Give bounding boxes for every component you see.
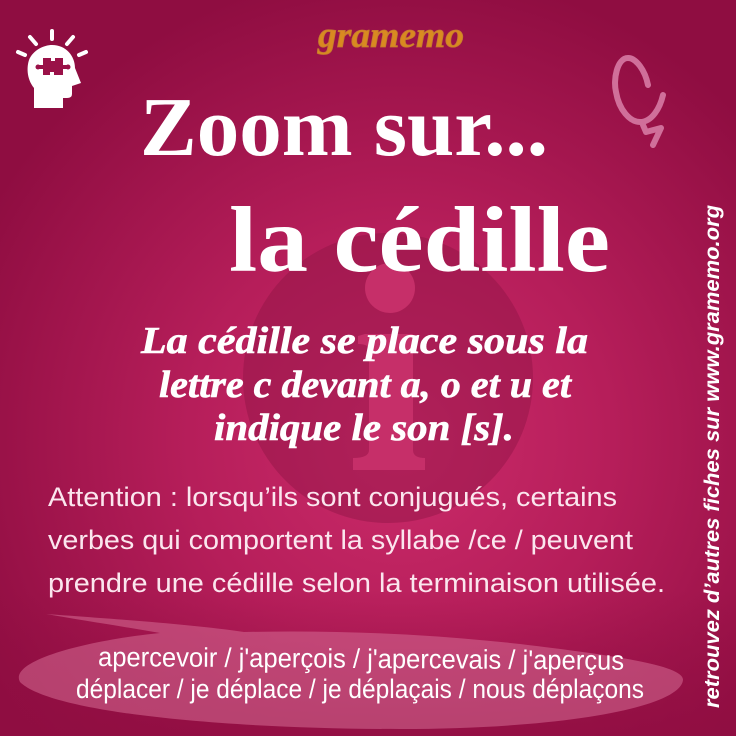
icon: c cedilla [615,58,663,145]
attention paragraph: Attention : lorsqu’ils sont conjugués, certains [48,482,617,512]
vertical website credit: retrouvez d’autres fiches sur www.gramemo.org [700,205,724,708]
title: Zoom sur...: Zoom sur... [140,81,548,174]
logo: gramemo: gramemo [317,15,464,55]
examples text [76,642,644,704]
rule statement: lettre c devant a, o et u et [159,364,573,406]
rule statement: indique le son [s]. [214,407,514,449]
attention paragraph: prendre une cédille selon la terminaison utilisée. [48,568,665,598]
title: la cédille: la cédille [229,189,610,292]
examples text: déplacer / je déplace / je déplaçais / nous déplaçons [76,674,644,704]
attention paragraph [48,482,665,598]
icon: info circle watermark [243,233,533,523]
bottom darkening band [0,590,736,736]
rule statement [140,320,588,449]
examples text: apercevoir / j'aperçois / j'apercevais / j'aperçus [98,642,624,676]
attention paragraph: verbes qui comportent la syllabe /ce / peuvent [48,525,634,555]
rule statement: La cédille se place sous la [140,320,588,362]
icon: head with puzzle piece and light rays [18,31,86,108]
speech bubble with examples [19,614,683,729]
